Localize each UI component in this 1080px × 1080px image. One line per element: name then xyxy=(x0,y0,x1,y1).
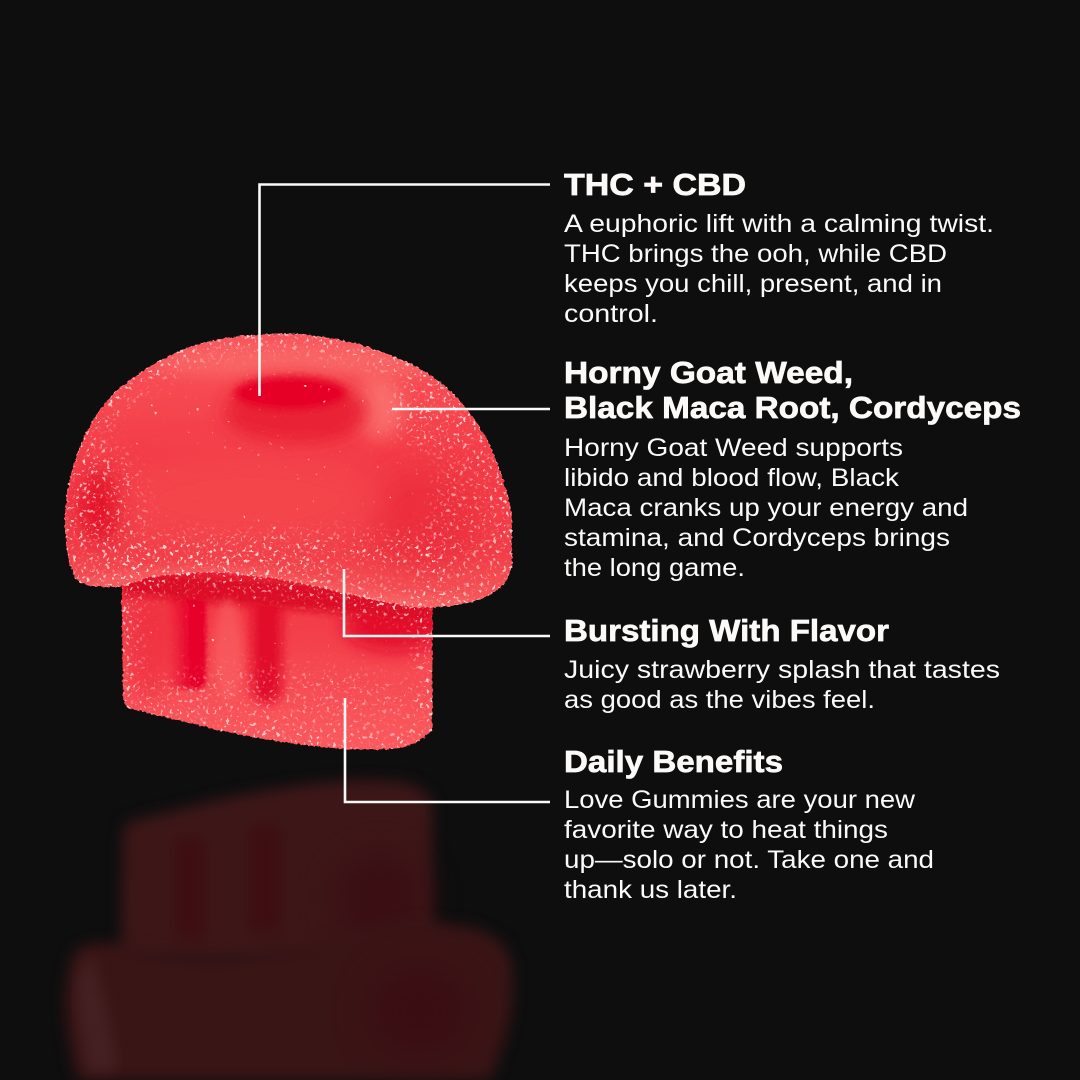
reflection of stem dark area xyxy=(334,853,426,937)
text block: Daily Benefits: up—solo or not. Take one and xyxy=(564,846,934,874)
leader line: Horny Goat Weed xyxy=(392,408,550,410)
reflection of stem xyxy=(121,780,433,960)
gummy stem xyxy=(120,572,434,750)
text block: THC + CBD: A euphoric lift with a calming twist. xyxy=(564,210,994,238)
text block: Bursting With Flavor: Juicy strawberry splash that tastes xyxy=(564,656,1000,684)
reflection of stem grooves xyxy=(176,826,280,938)
text block: Horny Goat Weed, Black Maca Root, Cordyceps: libido and blood flow, Black xyxy=(564,464,900,492)
text block: Horny Goat Weed, Black Maca Root, Cordyceps: Horny Goat Weed supports xyxy=(564,434,903,462)
text block: Horny Goat Weed, Black Maca Root, Cordyceps: the long game. xyxy=(564,554,745,582)
text block: THC + CBD xyxy=(564,168,994,328)
sugar crust outline xyxy=(65,334,512,607)
text block: THC + CBD: THC brings the ooh, while CBD xyxy=(564,240,947,268)
gummy cap xyxy=(60,334,512,612)
sugar crystals xyxy=(64,333,513,750)
text block: Daily Benefits: Love Gummies are your new xyxy=(564,786,916,814)
text block: Bursting With Flavor: as good as the vibes feel. xyxy=(564,686,875,714)
text block: Daily Benefits xyxy=(564,745,934,904)
leader line: Bursting With Flavor xyxy=(344,569,550,636)
text block: Horny Goat Weed, Black Maca Root, Cordyceps: Maca cranks up your energy and xyxy=(564,494,968,522)
leader line: THC + CBD xyxy=(260,184,550,396)
text block: Daily Benefits: favorite way to heat things xyxy=(564,816,888,844)
text block: Bursting With Flavor: Bursting With Flavor xyxy=(564,614,889,648)
text block: Bursting With Flavor xyxy=(564,614,1000,714)
text block: Horny Goat Weed, Black Maca Root, Cordyceps: Black Maca Root, Cordyceps xyxy=(564,391,1021,425)
text block: THC + CBD: THC + CBD xyxy=(564,168,746,202)
text block: Horny Goat Weed, Black Maca Root, Cordyceps: Horny Goat Weed, xyxy=(564,356,853,390)
infographic xyxy=(60,173,1020,1080)
reflection of cap xyxy=(65,923,512,1080)
text block: Daily Benefits: thank us later. xyxy=(564,876,737,904)
reflection of cap left highlight xyxy=(76,955,118,1072)
gummy reflection xyxy=(65,780,512,1080)
text block: THC + CBD: control. xyxy=(564,300,658,328)
reflection of cap dark area xyxy=(368,964,472,1056)
text block: Horny Goat Weed, Black Maca Root, Cordyceps: stamina, and Cordyceps brings xyxy=(564,524,950,552)
leader line: Daily Benefits xyxy=(345,698,550,802)
gummy product image xyxy=(64,332,513,750)
text block: THC + CBD: keeps you chill, present, and in xyxy=(564,270,942,298)
text block: Horny Goat Weed, Black Maca Root, Cordyceps xyxy=(564,356,1021,582)
text block: Daily Benefits: Daily Benefits xyxy=(564,745,783,779)
